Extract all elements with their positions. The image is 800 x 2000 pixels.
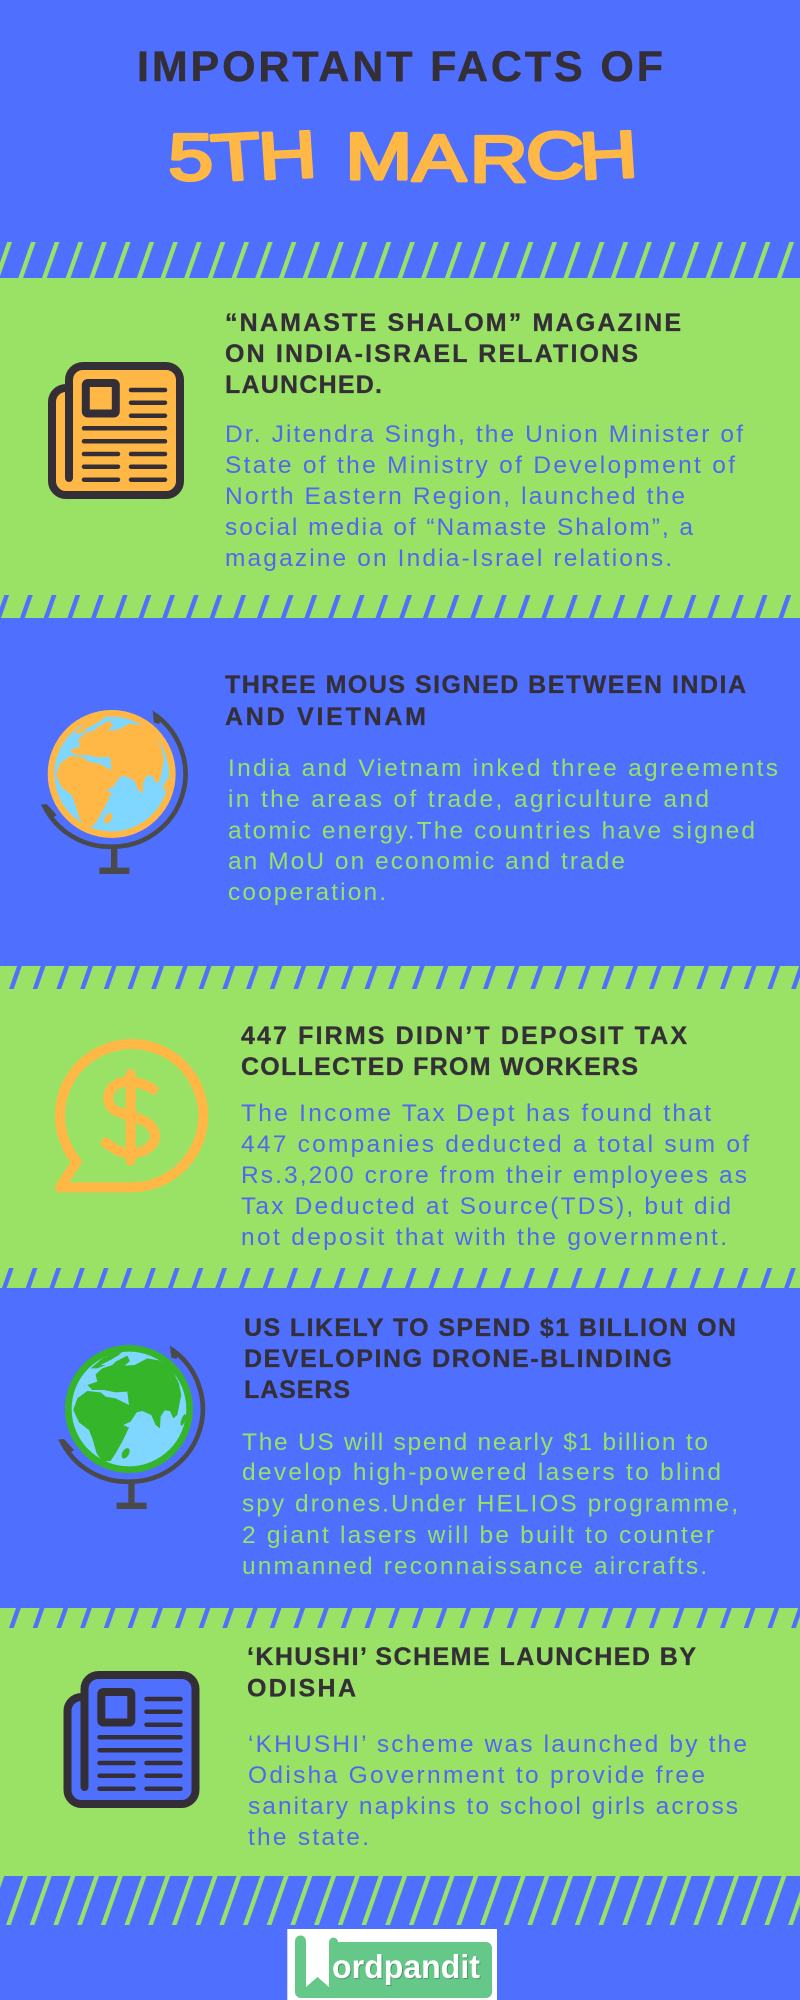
icon: blue newspaper [68, 1675, 196, 1804]
heading: ODISHA [247, 1674, 356, 1702]
title: Important facts of: IMPORTANT FACTS OF [137, 43, 663, 91]
title: date: 5TH MARCH [168, 117, 640, 196]
heading: LASERS [244, 1376, 350, 1404]
body text: in the areas of trade, agriculture and [228, 786, 709, 813]
body text: cooperation. [228, 879, 386, 906]
body text: Tax Deducted at Source(TDS), but did [241, 1193, 731, 1220]
body text: The US will spend nearly $1 billion to [242, 1429, 708, 1456]
panel: 447 firms [0, 966, 800, 1288]
body text: not deposit that with the government. [241, 1224, 727, 1251]
heading [225, 309, 681, 399]
body text [248, 1731, 747, 1851]
icon: orange newspaper [52, 366, 180, 495]
panel: Namaste Shalom [0, 278, 800, 618]
heading: US LIKELY TO SPEND $1 BILLION ON [244, 1314, 736, 1342]
body text [225, 421, 743, 572]
heading: “NAMASTE SHALOM” MAGAZINE [225, 309, 681, 337]
icon: orange globe [41, 710, 186, 874]
body text [228, 755, 778, 906]
panel: India Vietnam MoUs [40, 675, 778, 905]
body text: an MoU on economic and trade [228, 848, 625, 875]
panel: Khushi scheme [0, 1608, 800, 1876]
body text: Dr. Jitendra Singh, the Union Minister of [225, 421, 743, 448]
body text: the state. [248, 1824, 369, 1851]
panel: US lasers [58, 1317, 736, 1574]
body text: The Income Tax Dept has found that [241, 1100, 711, 1127]
logo: Wordpandit [287, 1929, 497, 2000]
icon: dollar speech bubble [60, 1044, 203, 1187]
heading: ‘KHUSHI’ SCHEME LAUNCHED BY [247, 1643, 696, 1671]
heading: 447 FIRMS DIDN’T DEPOSIT TAX [241, 1022, 687, 1050]
heading: ON INDIA-ISRAEL RELATIONS [225, 340, 638, 368]
body text: ‘KHUSHI’ scheme was launched by the [248, 1731, 747, 1758]
heading: COLLECTED FROM WORKERS [241, 1053, 638, 1081]
heading [241, 1022, 687, 1081]
body text: unmanned reconnaissance aircrafts. [242, 1553, 707, 1580]
body text: spy drones.Under HELIOS programme, [242, 1490, 738, 1518]
title block [137, 43, 663, 196]
body text: 2 giant lasers will be built to counter [242, 1522, 714, 1549]
body text: develop high-powered lasers to blind [242, 1459, 721, 1486]
body text: North Eastern Region, launched the [225, 483, 685, 510]
logo: Wordpandit: ordpandit [332, 1948, 480, 1985]
icon: green globe [58, 1345, 203, 1509]
body text: 447 companies deducted a total sum of [241, 1131, 749, 1158]
body text: Rs.3,200 crore from their employees as [241, 1162, 747, 1189]
heading: AND VIETNAM [225, 703, 426, 731]
heading: LAUNCHED. [225, 371, 382, 399]
body text: atomic energy.The countries have signed [228, 818, 755, 844]
heading [244, 1314, 736, 1404]
body text: magazine on India-Israel relations. [225, 545, 672, 572]
body text: India and Vietnam inked three agreements [228, 755, 778, 782]
body text [241, 1100, 749, 1251]
body text: Odisha Government to provide free [248, 1762, 705, 1789]
body text: social media of “Namaste Shalom”, a [225, 514, 693, 541]
body text [242, 1429, 738, 1580]
heading: THREE MOUS SIGNED BETWEEN INDIA [225, 671, 746, 699]
heading [247, 1643, 696, 1702]
heading [225, 671, 746, 731]
body text: sanitary napkins to school girls across [248, 1793, 738, 1820]
heading: DEVELOPING DRONE-BLINDING [244, 1345, 672, 1373]
body text: State of the Ministry of Development of [225, 452, 735, 479]
